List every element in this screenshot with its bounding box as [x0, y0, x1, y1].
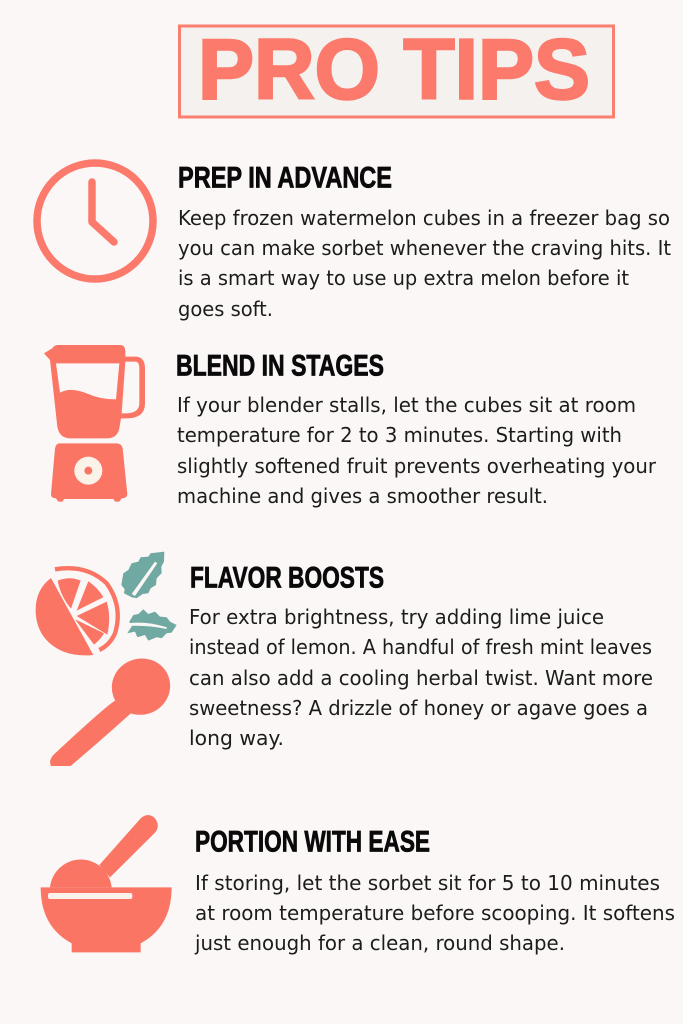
text block: portion with ease body — [194, 871, 675, 955]
text block: prep in advance body: goes soft. — [178, 297, 273, 321]
heading: portion with ease: PORTION WITH EASE — [195, 826, 430, 858]
text block: blend in stages body: slightly softened fruit prevents overheating your — [177, 454, 657, 478]
text block: flavor boosts body: For extra brightness, try adding lime juice — [189, 605, 604, 629]
text block: flavor boosts body — [189, 605, 653, 750]
tip: portion with ease — [194, 826, 675, 955]
text block: portion with ease body: just enough for a clean, round shape. — [194, 931, 565, 955]
text block: blend in stages body: machine and gives a smoother result. — [177, 484, 548, 508]
text block: prep in advance body: is a smart way to use up extra melon before it — [178, 266, 629, 290]
text block: flavor boosts body: long way. — [189, 726, 284, 750]
heading: blend in stages: BLEND IN STAGES — [176, 350, 384, 382]
text block: flavor boosts body: sweetness? A drizzle of honey or agave goes a — [189, 696, 648, 720]
heading: flavor boosts: FLAVOR BOOSTS — [190, 562, 384, 594]
icon: mint leaves — [121, 552, 177, 641]
text block: blend in stages body: temperature for 2 to 3 minutes. Starting with — [177, 423, 622, 447]
text block: blend in stages body — [177, 393, 657, 508]
text block: prep in advance body — [178, 206, 671, 321]
text block: flavor boosts body: instead of lemon. A handful of fresh mint leaves — [189, 635, 652, 659]
text block: prep in advance body: Keep frozen watermelon cubes in a freezer bag so — [178, 206, 670, 230]
title: pro tips banner: PRO TIPS — [198, 22, 590, 118]
text block: prep in advance body: you can make sorbet whenever the craving hits. It — [178, 236, 671, 260]
icon: citrus slice — [36, 568, 118, 655]
icon: blender — [44, 345, 145, 502]
heading: prep in advance: PREP IN ADVANCE — [178, 162, 392, 194]
text block: portion with ease body: If storing, let the sorbet sit for 5 to 10 minutes — [195, 871, 660, 895]
tip: flavor boosts — [189, 562, 653, 750]
text block: flavor boosts body: can also add a cooling herbal twist. Want more — [189, 666, 653, 690]
icon: bowl with scoop — [41, 815, 172, 952]
icon: clock — [37, 163, 153, 279]
tip: prep in advance — [178, 162, 671, 321]
icon: spoon — [50, 650, 178, 766]
text block: blend in stages body: If your blender stalls, let the cubes sit at room — [177, 393, 636, 417]
tip: blend in stages — [176, 350, 657, 508]
text block: portion with ease body: at room temperature before scooping. It softens — [195, 901, 675, 925]
